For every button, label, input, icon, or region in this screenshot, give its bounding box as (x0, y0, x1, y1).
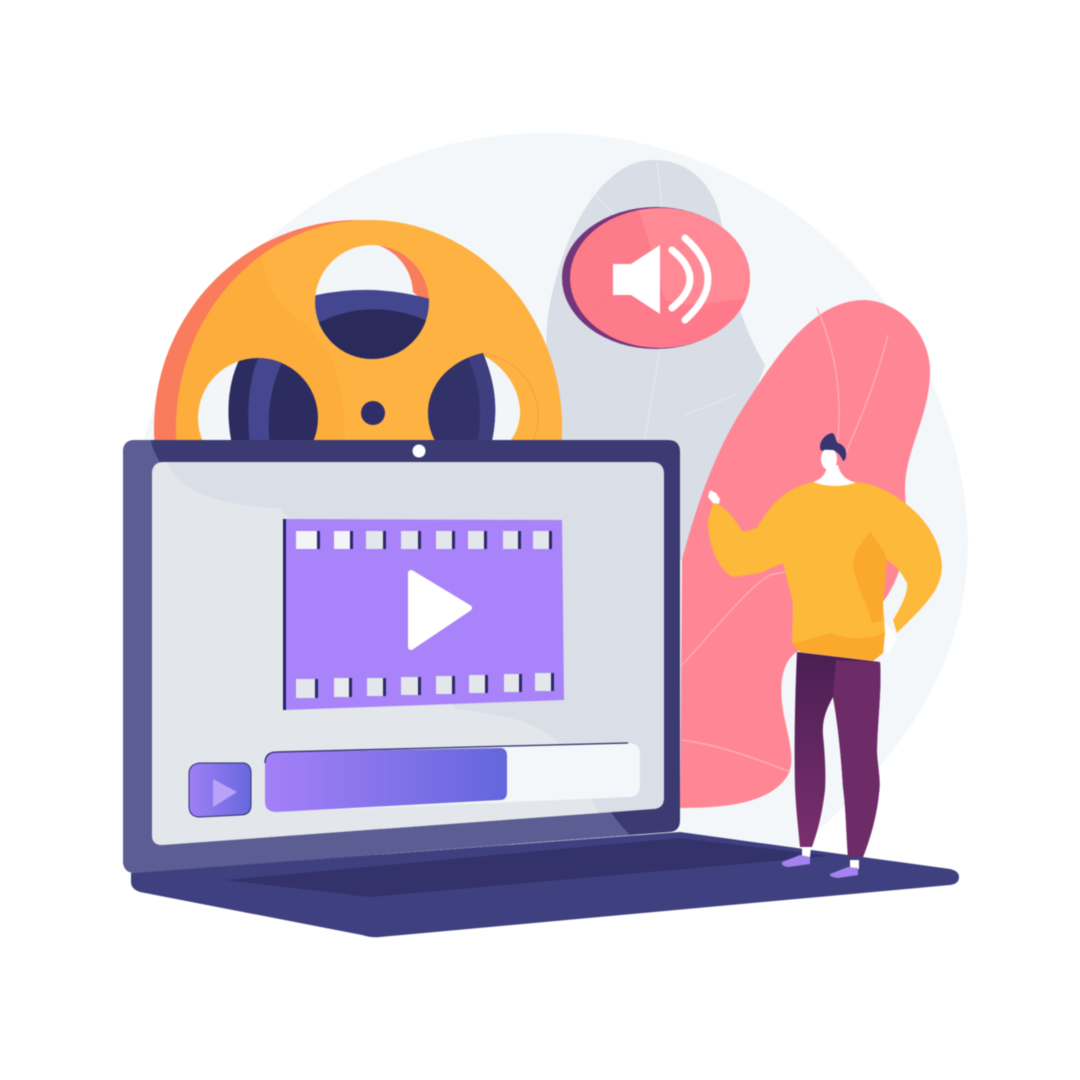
right shoe (830, 867, 858, 878)
hand at hip (871, 622, 897, 655)
person (708, 433, 942, 878)
speaker icon (613, 245, 660, 314)
speaker bubble (562, 200, 755, 349)
progress bar fill (265, 748, 507, 812)
small play button (189, 763, 251, 817)
sweater (708, 482, 942, 661)
left reel hole (197, 357, 319, 441)
face (821, 448, 837, 470)
neck and collar (813, 465, 858, 490)
socks (802, 847, 859, 869)
pointing hand (708, 490, 720, 504)
laptop screen (150, 460, 666, 860)
film strip frame (283, 519, 564, 710)
background circle (128, 133, 968, 870)
laptop lid (120, 436, 680, 880)
laptop camera (412, 444, 426, 458)
laptop base (131, 832, 959, 937)
top reel hole (314, 244, 430, 360)
reel hub (361, 401, 385, 425)
pants (795, 652, 880, 857)
sound waves (672, 238, 708, 320)
illustration (122, 133, 968, 938)
hair (820, 433, 846, 461)
progress bar track (265, 743, 640, 812)
bottom sprocket holes (296, 673, 554, 698)
film reel (153, 219, 563, 441)
pink blob (680, 300, 930, 808)
large play icon (411, 573, 469, 647)
left shoe (782, 855, 810, 867)
gray blob (546, 160, 765, 560)
sweater hem (792, 632, 885, 661)
top sprocket holes (296, 531, 552, 549)
sweater shading (853, 532, 887, 623)
right reel hole (428, 353, 520, 441)
